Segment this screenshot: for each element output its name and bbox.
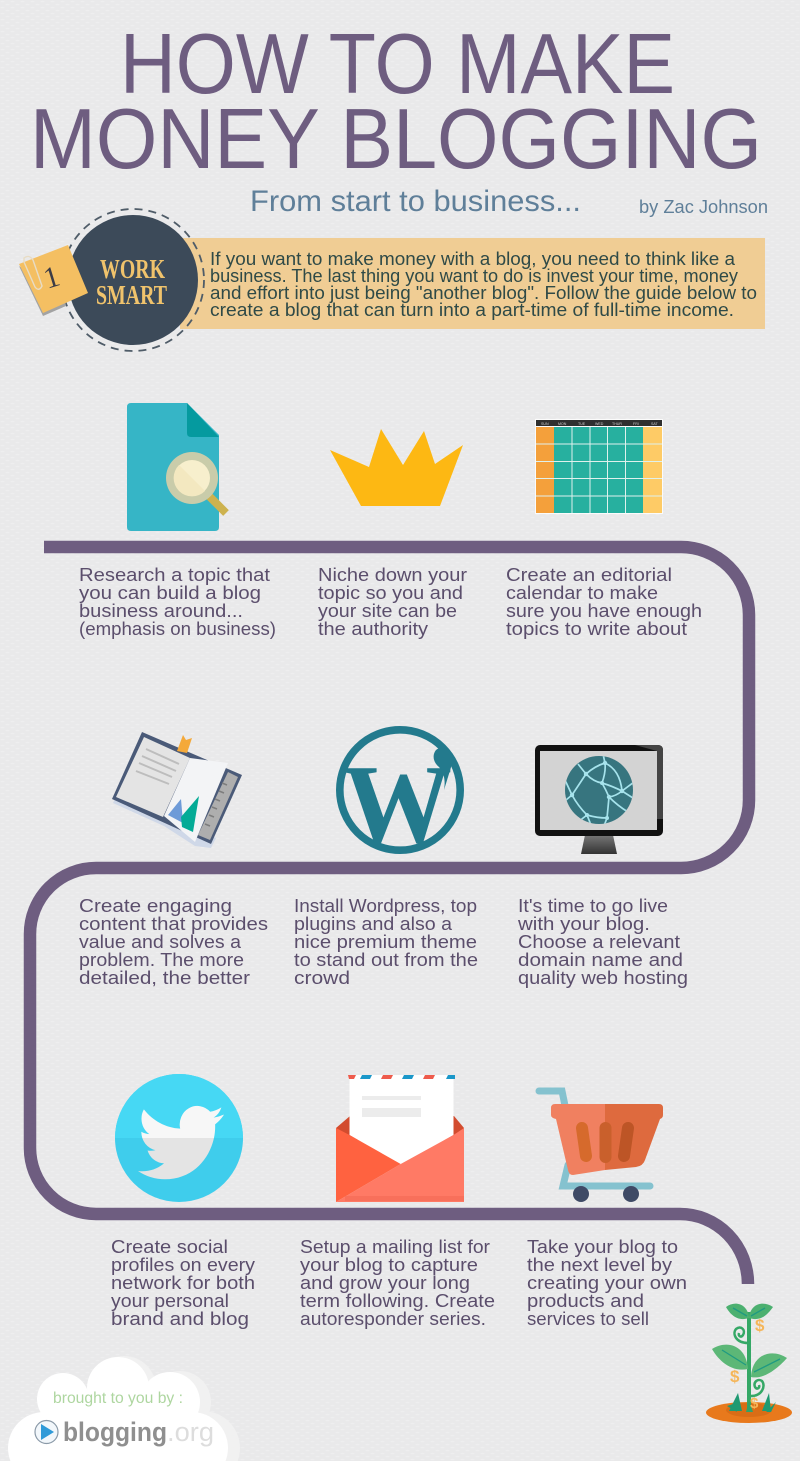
icon: money plant: $ bbox=[730, 1367, 740, 1386]
logo bbox=[35, 1417, 214, 1447]
work smart badge: SMART bbox=[96, 280, 167, 310]
step 8 text bbox=[300, 1237, 495, 1329]
step 6 text: It's time to go live bbox=[518, 896, 668, 916]
step 1 text: you can build a blog bbox=[79, 583, 261, 603]
intro text: create a blog that can turn into a part-time of full-time income. bbox=[210, 300, 734, 320]
step 7 text: your personal bbox=[111, 1291, 229, 1311]
step 5 text: nice premium theme bbox=[294, 932, 477, 952]
step 7 text: network for both bbox=[111, 1273, 255, 1293]
icon: shopping cart bbox=[539, 1091, 663, 1202]
step 3 text: topics to write about bbox=[506, 619, 687, 639]
step 4 text: Create engaging bbox=[79, 896, 232, 916]
step 9 text: the next level by bbox=[527, 1255, 672, 1275]
step 6 text: quality web hosting bbox=[518, 968, 688, 988]
step 9 text: creating your own bbox=[527, 1273, 687, 1293]
icon: monitor with globe bbox=[535, 745, 663, 854]
logo: blogging bbox=[63, 1417, 167, 1447]
icon: calendar: SUN bbox=[541, 422, 549, 426]
work smart badge bbox=[62, 209, 204, 351]
intro banner bbox=[180, 238, 765, 329]
step 3 text: Create an editorial bbox=[506, 565, 672, 585]
intro text bbox=[210, 249, 757, 320]
intro text: If you want to make money with a blog, you need to think like a bbox=[210, 249, 736, 269]
icon: money plant bbox=[706, 1304, 792, 1423]
icon: twitter bbox=[115, 1074, 243, 1202]
step 4 text: content that provides bbox=[79, 914, 268, 934]
icon: calendar: FRI bbox=[633, 422, 639, 426]
step 5 text bbox=[294, 896, 478, 988]
step 2 text: topic so you and bbox=[318, 583, 463, 603]
icon: calendar: MON bbox=[558, 422, 567, 426]
step 8 text: autoresponder series. bbox=[300, 1309, 486, 1329]
step 9 text: products and bbox=[527, 1291, 644, 1311]
step 1 text: business around... bbox=[79, 601, 243, 621]
step 4 text bbox=[79, 896, 268, 988]
step 5 text: plugins and also a bbox=[294, 914, 453, 934]
title: HOW TO MAKE bbox=[120, 17, 675, 112]
step 4 text: problem. The more bbox=[79, 950, 244, 970]
intro text: business. The last thing you want to do is invest your time, money bbox=[210, 266, 738, 286]
step 5 text: Install Wordpress, top bbox=[294, 896, 477, 916]
note with paperclip: 1 bbox=[40, 260, 64, 296]
icon: calendar: SAT bbox=[651, 422, 659, 426]
icon: calendar: THUR bbox=[612, 422, 622, 426]
step 6 text bbox=[517, 896, 688, 988]
credit text: brought to you by : bbox=[53, 1390, 183, 1407]
step 7 text: Create social bbox=[111, 1237, 228, 1257]
step 7 text: profiles on every bbox=[111, 1255, 255, 1275]
step 3 text bbox=[506, 565, 702, 639]
step 1 text: (emphasis on business) bbox=[79, 619, 276, 639]
step 6 text: Choose a relevant bbox=[518, 932, 680, 952]
step 9 text bbox=[527, 1237, 687, 1329]
icon: calendar: TUE bbox=[578, 422, 586, 426]
icon: wordpress logo: W bbox=[343, 743, 452, 867]
logo: .org bbox=[167, 1417, 214, 1447]
icon: money plant: $ bbox=[755, 1316, 765, 1335]
step 5 text: crowd bbox=[294, 968, 350, 988]
step 7 text: brand and blog bbox=[111, 1309, 249, 1329]
step 4 text: value and solves a bbox=[79, 932, 242, 952]
step 2 text: Niche down your bbox=[318, 565, 467, 585]
step 6 text: with your blog. bbox=[517, 914, 650, 934]
step 2 text: the authority bbox=[318, 619, 428, 639]
step 9 text: services to sell bbox=[527, 1309, 649, 1329]
step 8 text: term following. Create bbox=[300, 1291, 495, 1311]
subtitle: From start to business... bbox=[250, 185, 581, 218]
step 7 text bbox=[111, 1237, 255, 1329]
work smart badge: WORK bbox=[100, 254, 165, 284]
icon: envelope with letter bbox=[336, 1075, 464, 1202]
step 8 text: and grow your long bbox=[300, 1273, 470, 1293]
title: MONEY BLOGGING bbox=[30, 92, 762, 187]
icon: document with magnifier bbox=[127, 403, 226, 531]
step 8 text: your blog to capture bbox=[300, 1255, 478, 1275]
icon: open book bbox=[112, 732, 242, 848]
intro text: and effort into just being "another blog". Follow the guide below to bbox=[210, 283, 757, 303]
step 1 text bbox=[79, 565, 276, 639]
step 5 text: to stand out from the bbox=[294, 950, 478, 970]
note with paperclip bbox=[19, 245, 88, 316]
step 3 text: calendar to make bbox=[506, 583, 658, 603]
title bbox=[30, 17, 762, 187]
step 1 text: Research a topic that bbox=[79, 565, 270, 585]
cloud: brought to you by bbox=[8, 1356, 240, 1461]
icon: calendar: WED bbox=[595, 422, 604, 426]
step 4 text: detailed, the better bbox=[79, 968, 250, 988]
winding path bbox=[30, 547, 749, 1284]
step 2 text: your site can be bbox=[318, 601, 457, 621]
icon: calendar bbox=[535, 419, 663, 514]
byline: by Zac Johnson bbox=[639, 197, 768, 217]
step 6 text: domain name and bbox=[518, 950, 683, 970]
icon: crown bbox=[330, 429, 463, 506]
step 9 text: Take your blog to bbox=[527, 1237, 678, 1257]
step 3 text: sure you have enough bbox=[506, 601, 702, 621]
step 8 text: Setup a mailing list for bbox=[300, 1237, 490, 1257]
step 2 text bbox=[318, 565, 467, 639]
icon: money plant: $ bbox=[750, 1395, 759, 1412]
